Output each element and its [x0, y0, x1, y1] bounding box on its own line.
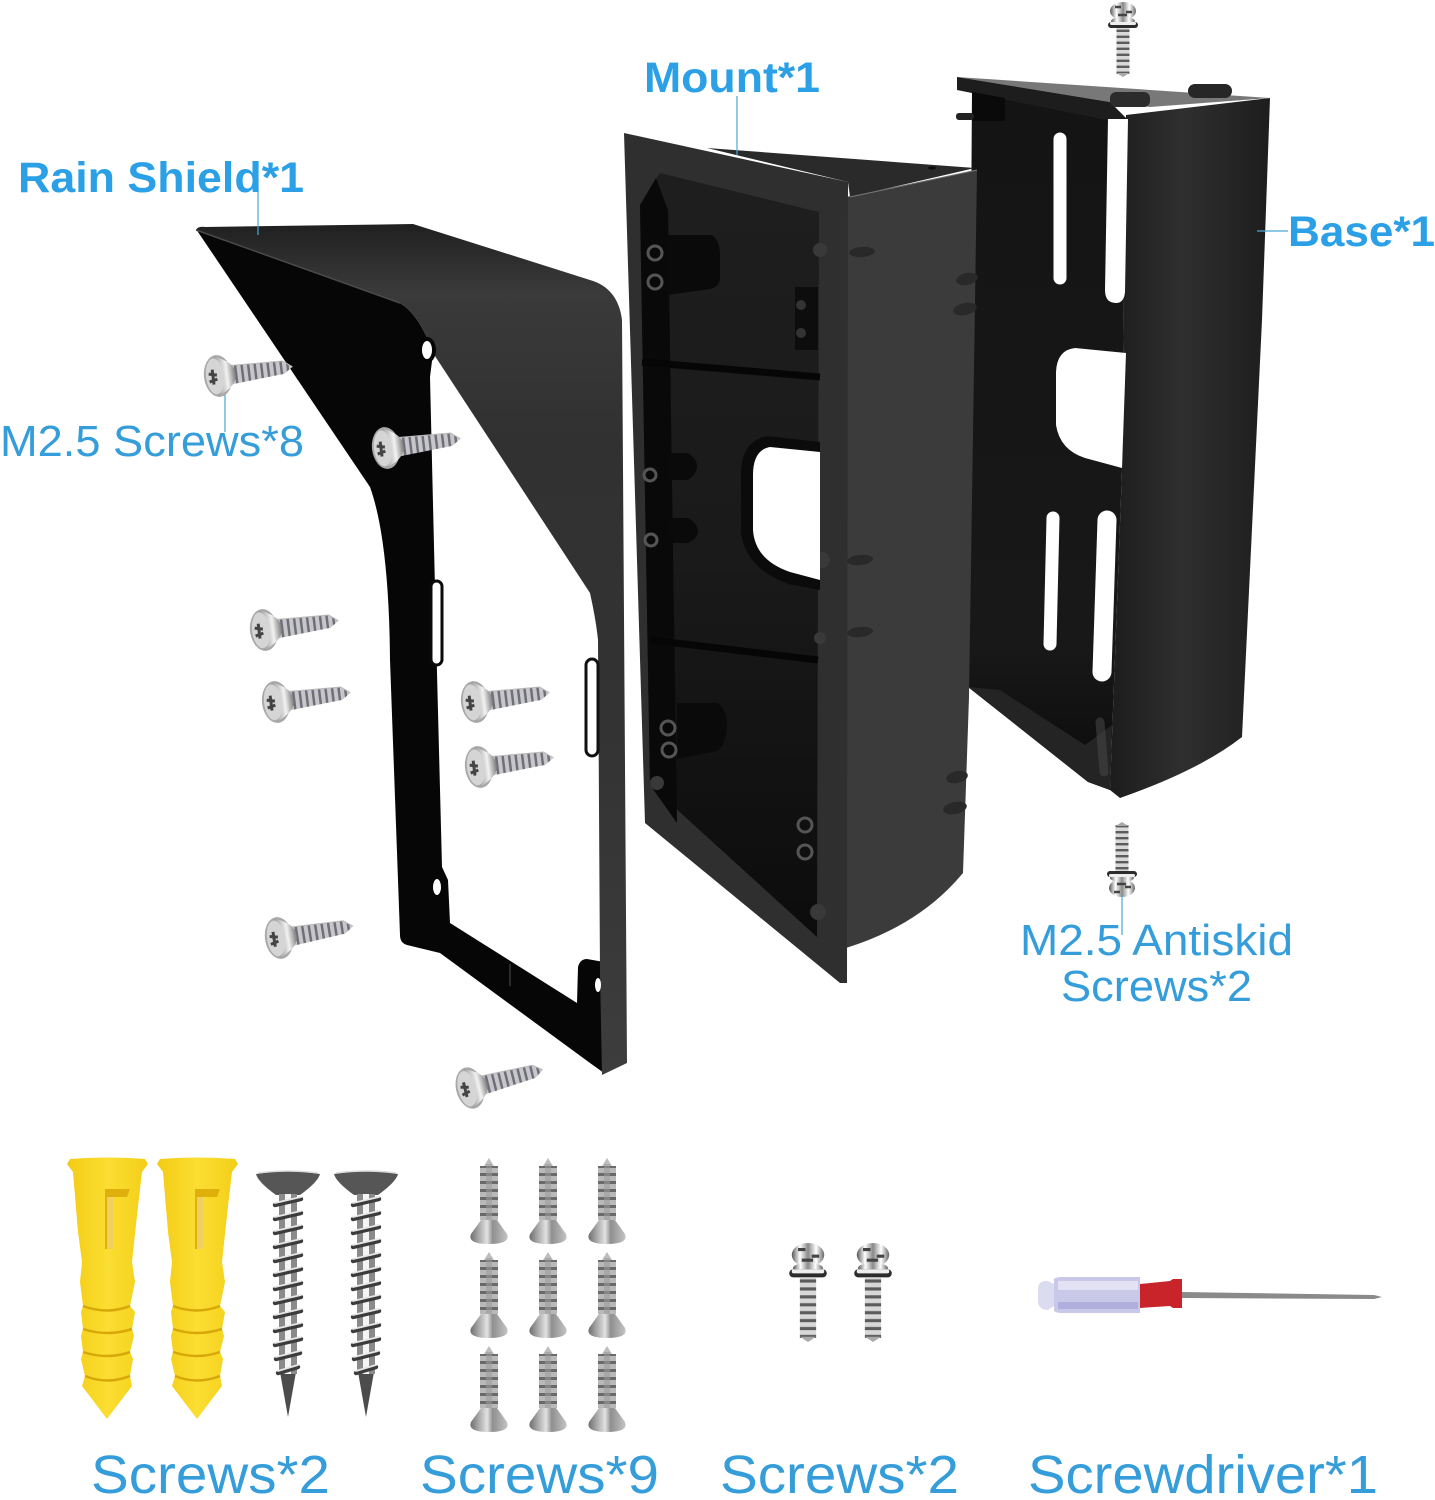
label: antiskid screws	[1020, 916, 1293, 1011]
leader lines	[225, 96, 1288, 935]
label: rain shield: Rain Shield*1	[18, 154, 304, 202]
label: base: Base*1	[1288, 208, 1435, 256]
panel: base	[956, 77, 1270, 798]
panel: rain shield	[196, 224, 627, 1075]
label: antiskid screws: Screws*2	[1061, 962, 1252, 1011]
label: mount: Mount*1	[644, 54, 820, 102]
panel: mount	[624, 133, 979, 983]
icon: yellow wall anchors	[67, 1158, 238, 1419]
hole in mount	[741, 436, 820, 590]
label: antiskid screws: M2.5 Antiskid	[1020, 916, 1293, 965]
icon: two machine screws	[789, 1243, 892, 1342]
icon: nine flat head screws	[470, 1158, 626, 1432]
slots in base	[1050, 119, 1128, 672]
antiskid screws on base	[1107, 2, 1138, 897]
M2.5 screws on shield	[202, 346, 556, 1112]
label: M2.5 screws: M2.5 Screws*8	[0, 417, 304, 466]
icon: long wood screws	[256, 1171, 398, 1417]
icon: screwdriver	[1038, 1277, 1382, 1313]
